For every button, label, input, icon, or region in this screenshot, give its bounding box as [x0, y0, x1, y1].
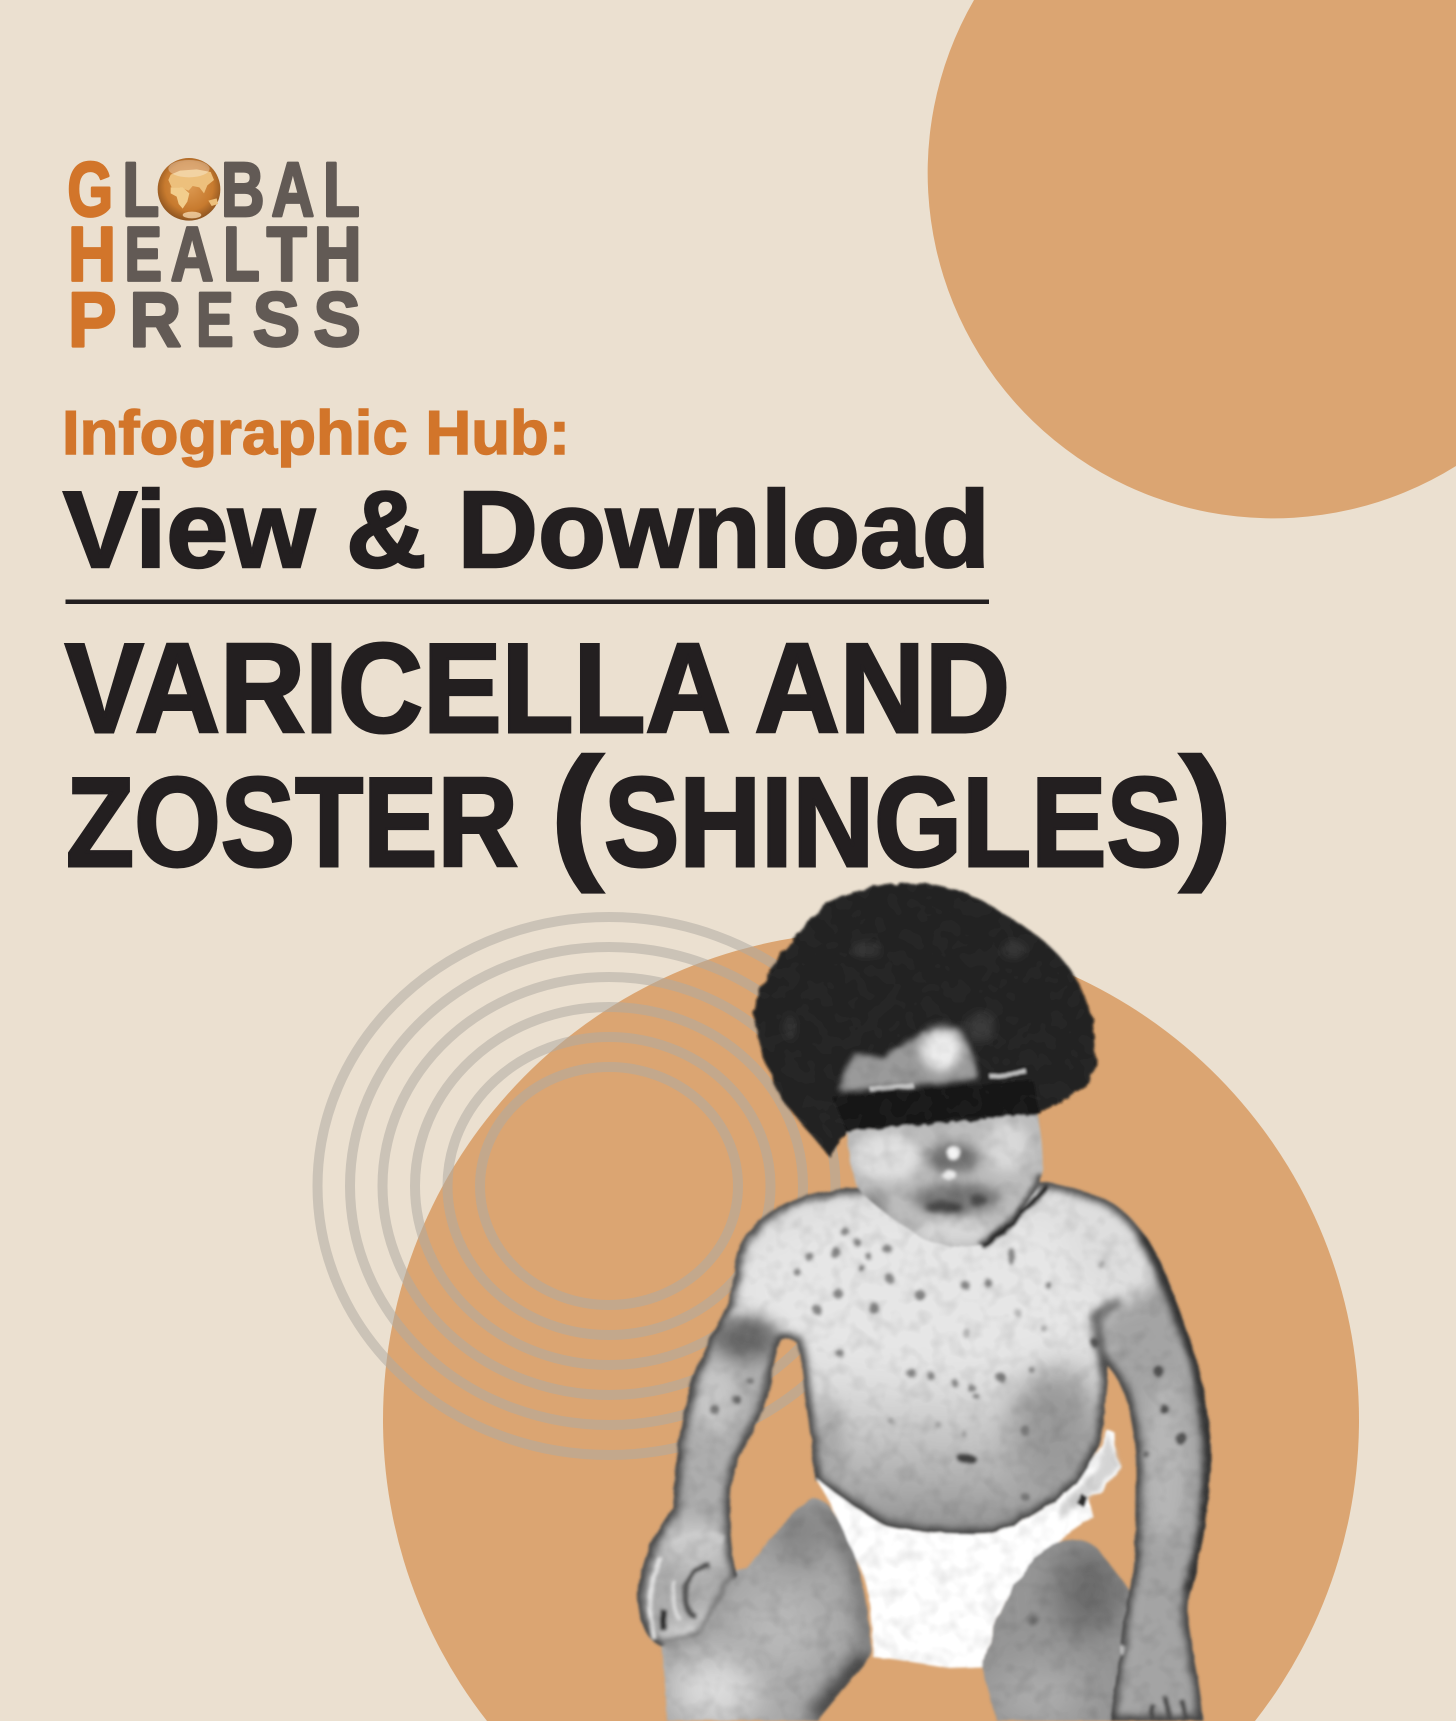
hair: [752, 884, 1097, 1157]
logo letters: orange initials: [67, 146, 116, 362]
left hand details: [650, 1535, 723, 1640]
more spots on right arm and belly: [999, 1367, 1187, 1501]
heading underline: [66, 600, 989, 604]
logo letters: grey wordmark: L: [122, 146, 159, 233]
logo: Global Health Press: [67, 146, 362, 363]
right thigh: [981, 1538, 1130, 1721]
logo letters: grey wordmark: T: [267, 211, 307, 298]
child photograph: [630, 884, 1230, 1721]
title line 2: ): [1178, 726, 1234, 894]
cheeks and facial shading: [853, 1122, 1030, 1243]
torso and arms: [630, 1170, 1230, 1721]
title line 1: VARICELLA AND: [65, 617, 1010, 759]
concentric rings: [318, 917, 900, 1455]
right arm dark outer edge: [1143, 1233, 1210, 1593]
right arm shading: [1098, 1270, 1215, 1721]
title line 2: (: [549, 726, 605, 894]
right hand details: [1118, 1643, 1189, 1720]
title line 2: SHINGLES: [604, 751, 1182, 893]
soft dark outline: [638, 1182, 1211, 1721]
belly shading: [816, 1399, 1084, 1533]
chickenpox spots on chest and arms: [710, 1227, 1186, 1463]
logo letters: grey wordmark: S: [253, 276, 300, 363]
logo letters: orange initials: G: [67, 146, 113, 233]
black censor bar over eyes: [832, 1080, 1040, 1132]
logo letters: grey wordmark: [122, 146, 362, 363]
logo letters: grey wordmark: H: [314, 212, 362, 297]
logo letters: grey wordmark: L: [323, 146, 360, 233]
neck crease: [982, 1186, 1047, 1246]
left thigh: [660, 1496, 873, 1721]
large circle behind child: [383, 932, 1359, 1721]
logo letters: grey wordmark: A: [271, 147, 314, 233]
title line 2: ZOSTER: [66, 751, 518, 893]
logo letters: grey wordmark: R: [129, 276, 181, 363]
logo letters: orange initials: H: [68, 212, 116, 297]
forehead: [840, 1028, 1027, 1092]
logo letters: orange initials: P: [68, 276, 116, 362]
logo letters: grey wordmark: A: [171, 211, 214, 297]
face: [844, 1112, 1044, 1248]
diaper: [815, 1430, 1122, 1668]
subtitle: Infographic Hub: Infographic Hub:: [62, 399, 570, 468]
seam softening between left hand and knee: [664, 1578, 736, 1646]
heading: View & Download: View & Download: [63, 469, 990, 591]
title line 2: [66, 726, 1234, 894]
logo letters: grey wordmark: B: [221, 146, 265, 233]
left arm shading: [638, 1346, 774, 1639]
logo letters: grey wordmark: E: [196, 277, 234, 363]
decorative circle: top right: [928, 0, 1456, 518]
logo letters: grey wordmark: E: [124, 212, 162, 297]
logo letters: grey wordmark: L: [223, 210, 260, 297]
logo globe icon: [158, 158, 220, 221]
logo letters: grey wordmark: S: [313, 276, 361, 363]
